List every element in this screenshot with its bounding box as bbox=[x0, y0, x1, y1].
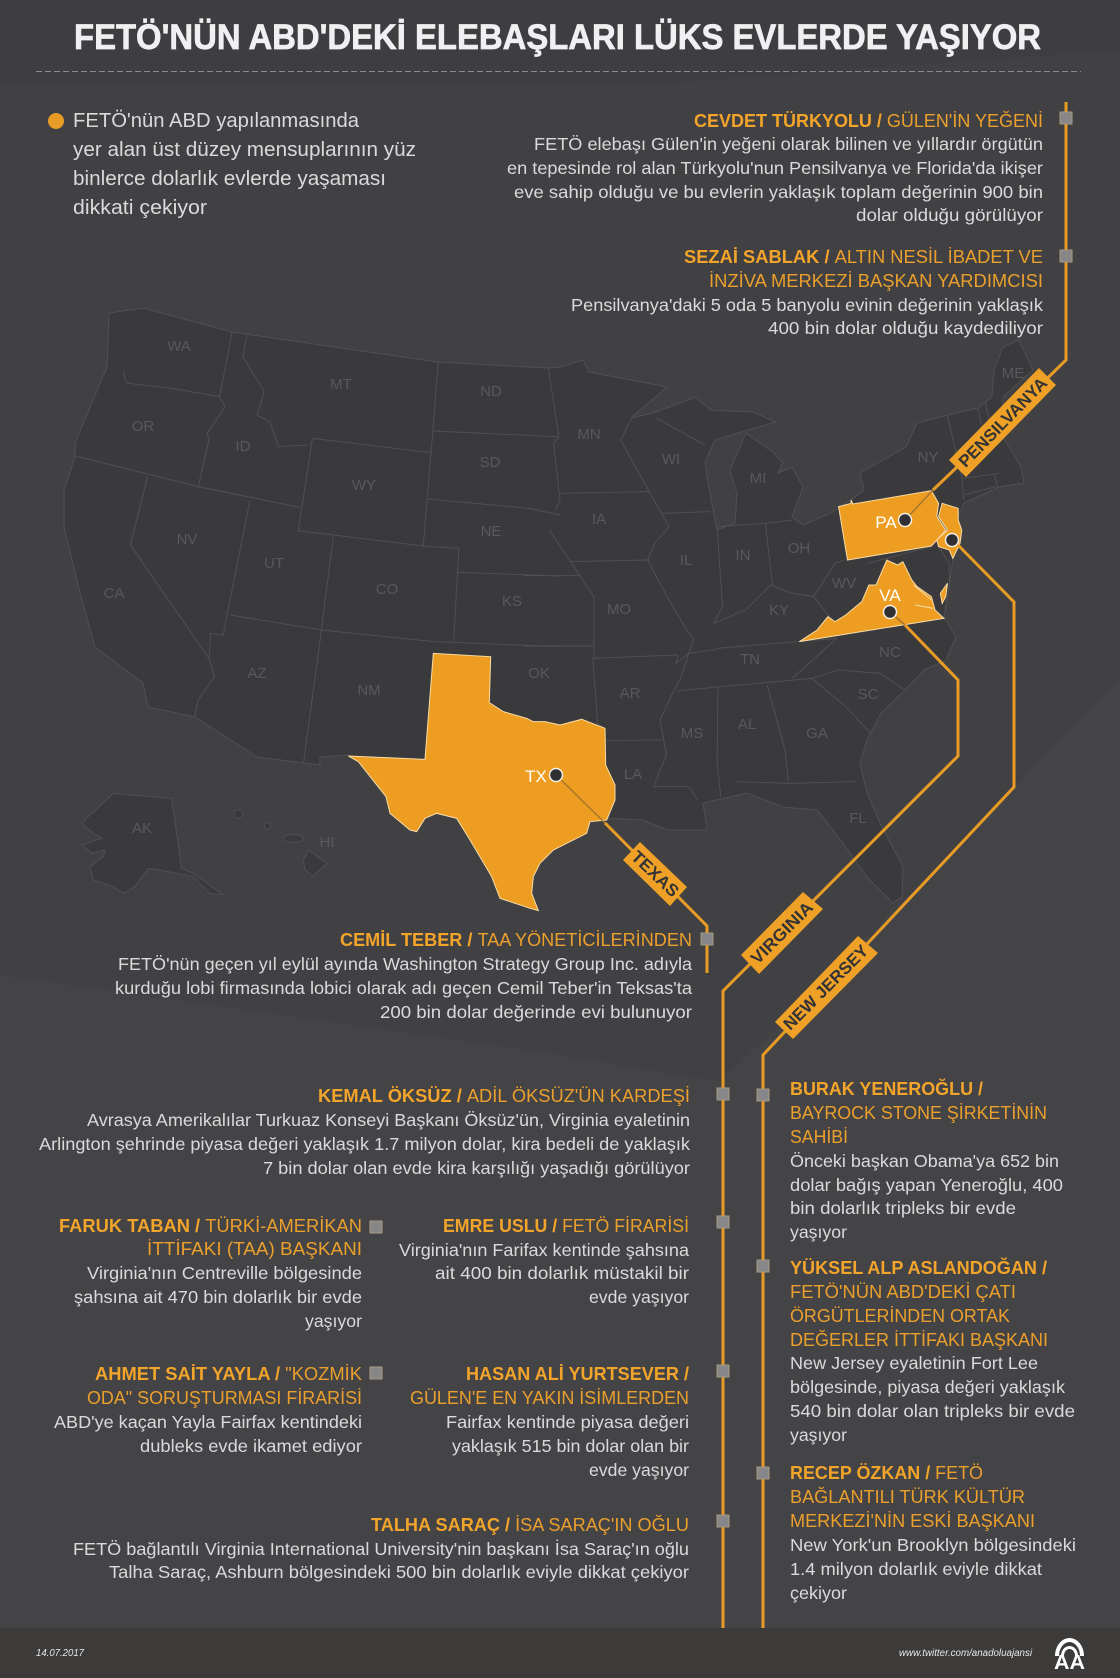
state labels: IA bbox=[592, 511, 606, 528]
body bbox=[507, 134, 1043, 225]
profile markers bbox=[370, 112, 1072, 1527]
body: Virginia'nın Centreville bölgesinde bbox=[87, 1263, 362, 1283]
icon: Anadolu Agency logo bbox=[1054, 1638, 1085, 1674]
line: Texas bbox=[556, 775, 605, 823]
state labels: OR bbox=[132, 418, 154, 435]
profile: Emre Uslu bbox=[399, 1216, 689, 1307]
icon: Anadolu Agency logo: AA bbox=[1054, 1652, 1085, 1674]
heading: CEMİL TEBER / TAA YÖNETİCİLERİNDEN bbox=[340, 930, 692, 950]
body: 200 bin dolar değerinde evi bulunuyor bbox=[380, 1002, 692, 1022]
profile: Yüksel Alp Aslandoğan bbox=[790, 1257, 1075, 1445]
body: Önceki başkan Obama'ya 652 bin bbox=[790, 1151, 1059, 1171]
state labels: NC bbox=[879, 644, 901, 661]
state labels: ID bbox=[236, 438, 251, 455]
heading: YÜKSEL ALP ASLANDOĞAN / bbox=[790, 1257, 1047, 1278]
state: Pennsylvania, New Jersey, Delaware and Virginia bbox=[799, 491, 962, 642]
state labels: OK bbox=[528, 665, 550, 682]
profile: Talha Saraç bbox=[73, 1514, 689, 1582]
state labels: MI bbox=[750, 470, 766, 487]
state labels: KY bbox=[769, 602, 789, 619]
heading: TALHA SARAÇ / İSA SARAÇ'IN OĞLU bbox=[371, 1514, 689, 1535]
state labels: MN bbox=[577, 426, 601, 443]
state labels: MS bbox=[681, 725, 703, 742]
state labels: HI bbox=[320, 834, 334, 851]
label: Virginia: VIRGINIA bbox=[747, 898, 817, 968]
label: Texas bbox=[623, 842, 687, 906]
state labels: ME bbox=[1002, 365, 1024, 382]
body: Arlington şehrinde piyasa değeri yaklaşık 1.7 milyon dolar, kira bedeli de yaklaşık bbox=[39, 1134, 690, 1154]
intro text bbox=[48, 110, 416, 219]
state labels: LA bbox=[624, 766, 642, 783]
map marker: Texas bbox=[525, 767, 562, 786]
date: 14.07.2017 bbox=[36, 1648, 84, 1659]
profile: Recep Özkan bbox=[790, 1463, 1076, 1603]
state labels: NV bbox=[177, 531, 197, 548]
footer bbox=[0, 1628, 1120, 1678]
intro text: yer alan üst düzey mensuplarının yüz bbox=[73, 139, 416, 161]
profile: Cevdet Türkyolu bbox=[507, 110, 1043, 225]
profile: Kemal Öksüz bbox=[39, 1086, 690, 1178]
body bbox=[74, 1263, 362, 1331]
connector lines bbox=[556, 102, 1066, 1628]
body: Avrasya Amerikalılar Turkuaz Konseyi Başkanı Öksüz'ün, Virginia eyaletinin bbox=[87, 1110, 690, 1130]
land bbox=[64, 308, 1033, 903]
map marker: Virginia bbox=[879, 586, 901, 618]
state labels: SD bbox=[480, 454, 501, 471]
profile: Yüksel Alp Aslandoğan: DEĞERLER İTTİFAKI BAŞKANI bbox=[790, 1329, 1048, 1350]
state labels: MO bbox=[607, 601, 631, 618]
state labels: WY bbox=[352, 477, 376, 494]
body: dolar olduğu görülüyor bbox=[856, 205, 1043, 225]
body: Talha Saraç, Ashburn bölgesindeki 500 bin dolarlık eviyle dikkat çekiyor bbox=[109, 1562, 689, 1582]
label: Pensilvanya: PENSILVANYA bbox=[955, 374, 1051, 471]
heading: EMRE USLU / FETÖ FİRARİSİ bbox=[443, 1216, 689, 1236]
body: 1.4 milyon dolarlık eviyle dikkat bbox=[790, 1559, 1042, 1579]
profile: Faruk Taban bbox=[59, 1216, 362, 1331]
body: kurduğu lobi firmasında lobici olarak adı geçen Cemil Teber'in Teksas'ta bbox=[115, 978, 692, 998]
body: yaşıyor bbox=[305, 1311, 362, 1331]
state labels: WA bbox=[167, 338, 191, 355]
map marker: New Jersey bbox=[946, 534, 958, 546]
body: yaşıyor bbox=[790, 1425, 847, 1445]
body: FETÖ bağlantılı Virginia International University'nin başkanı İsa Saraç'ın oğlu bbox=[73, 1539, 689, 1559]
body: FETÖ elebaşı Gülen'in yeğeni olarak bilinen ve yıllardır örgütün bbox=[534, 134, 1043, 154]
state labels: KS bbox=[502, 593, 522, 610]
label: Virginia bbox=[741, 892, 823, 974]
profile: Yüksel Alp Aslandoğan: ÖRGÜTLERİNDEN ORTAK bbox=[790, 1306, 1010, 1326]
body: dubleks evde ikamet ediyor bbox=[140, 1436, 362, 1456]
state labels: GA bbox=[806, 725, 828, 742]
heading: HASAN ALİ YURTSEVER / bbox=[466, 1364, 689, 1384]
source link: www.twitter.com/anadoluajansi bbox=[899, 1648, 1033, 1659]
Alaska and Hawaii bbox=[82, 793, 327, 895]
body: eve sahip olduğu ve bu evlerin yaklaşık toplam değerinin 900 bin bbox=[514, 182, 1043, 202]
body: New Jersey eyaletinin Fort Lee bbox=[790, 1353, 1038, 1373]
heading: AHMET SAİT YAYLA / "KOZMİK bbox=[95, 1364, 362, 1384]
body bbox=[571, 295, 1043, 338]
state labels: SC bbox=[858, 686, 879, 703]
state labels: AL bbox=[738, 716, 756, 733]
body: yaklaşık 515 bin dolar olan bir bbox=[452, 1436, 689, 1456]
state labels: WI bbox=[662, 451, 680, 468]
state labels: ND bbox=[480, 383, 502, 400]
icon: orange bullet bbox=[48, 113, 64, 129]
profile: Ahmet Sait Yayla: ODA" SORUŞTURMASI FİRARİSİ bbox=[87, 1388, 362, 1408]
body: evde yaşıyor bbox=[589, 1287, 689, 1307]
body bbox=[790, 1151, 1063, 1242]
state labels: AR bbox=[620, 685, 641, 702]
profile: Burak Yeneroğlu: BAYROCK STONE ŞİRKETİNİN bbox=[790, 1103, 1047, 1123]
body bbox=[39, 1110, 690, 1178]
body: 7 bin dolar olan evde kira karşılığı yaşadığı görülüyor bbox=[263, 1158, 690, 1178]
profile: Burak Yeneroğlu bbox=[790, 1078, 1063, 1242]
body bbox=[790, 1353, 1075, 1445]
body bbox=[399, 1240, 689, 1307]
state labels: IL bbox=[680, 552, 692, 569]
intro text: binlerce dolarlık evlerde yaşaması bbox=[73, 168, 386, 190]
western state borders bbox=[75, 332, 560, 763]
profile: Burak Yeneroğlu: SAHİBİ bbox=[790, 1127, 848, 1147]
intro text: FETÖ'nün ABD yapılanmasında bbox=[73, 110, 360, 132]
body: New York'un Brooklyn bölgesindeki bbox=[790, 1535, 1076, 1555]
body: çekiyor bbox=[790, 1583, 847, 1603]
body: Pensilvanya'daki 5 oda 5 banyolu evinin değerinin yaklaşık bbox=[571, 295, 1043, 315]
profile: Sezai Sablak bbox=[571, 247, 1043, 338]
body bbox=[790, 1535, 1076, 1603]
label: New Jersey: NEW JERSEY bbox=[780, 941, 873, 1034]
state labels: CA bbox=[104, 585, 124, 602]
state labels: NE bbox=[481, 523, 501, 540]
profile: Recep Özkan: MERKEZİ'NİN ESKİ BAŞKANI bbox=[790, 1511, 1035, 1531]
map marker: Virginia: VA bbox=[879, 586, 901, 605]
profile: Ahmet Sait Yayla bbox=[54, 1364, 362, 1456]
state labels bbox=[104, 338, 1024, 851]
body bbox=[54, 1412, 362, 1456]
body bbox=[446, 1412, 689, 1480]
profile: Hasan Ali Yurtsever bbox=[410, 1364, 689, 1480]
body: Fairfax kentinde piyasa değeri bbox=[446, 1412, 689, 1432]
map marker: Texas: TX bbox=[525, 767, 547, 786]
heading: FARUK TABAN / TÜRKİ-AMERİKAN bbox=[59, 1216, 362, 1236]
state labels: NY bbox=[918, 449, 938, 466]
profile: Hasan Ali Yurtsever: GÜLEN'E EN YAKIN İSİMLERDEN bbox=[410, 1388, 689, 1408]
state: Texas bbox=[348, 653, 615, 911]
profile: Faruk Taban: İTTİFAKI (TAA) BAŞKANI bbox=[147, 1239, 362, 1259]
body: 400 bin dolar olduğu kaydediliyor bbox=[768, 318, 1043, 338]
label: Texas: TEXAS bbox=[627, 847, 683, 901]
profile: Sezai Sablak: İNZİVA MERKEZİ BAŞKAN YARDIMCISI bbox=[709, 271, 1043, 291]
body: Virginia'nın Farifax kentinde şahsına bbox=[399, 1240, 689, 1260]
state labels: TN bbox=[740, 651, 760, 668]
profile: Cemil Teber bbox=[115, 930, 692, 1022]
body: en tepesinde rol alan Türkyolu'nun Pensilvanya ve Florida'da ikişer bbox=[507, 158, 1043, 178]
highlighted states bbox=[348, 491, 962, 911]
body: şahsına ait 470 bin dolarlık bir evde bbox=[74, 1287, 362, 1307]
state labels: OH bbox=[788, 540, 810, 557]
title: FETÖ'NÜN ABD'DEKİ ELEBAŞLARI LÜKS EVLERDE YAŞIYOR bbox=[74, 18, 1041, 57]
state labels: WV bbox=[832, 575, 856, 592]
profile: Yüksel Alp Aslandoğan: FETÖ'NÜN ABD'DEKİ ÇATI bbox=[790, 1282, 1016, 1302]
eastern state borders bbox=[524, 402, 999, 800]
body: ait 400 bin dolarlık müstakil bir bbox=[435, 1263, 689, 1283]
heading: KEMAL ÖKSÜZ / ADİL ÖKSÜZ'ÜN KARDEŞİ bbox=[318, 1086, 690, 1106]
state labels: MT bbox=[330, 376, 352, 393]
map marker: Pennsylvania bbox=[875, 513, 912, 532]
intro text: dikkati çekiyor bbox=[73, 197, 207, 219]
state labels: IN bbox=[736, 547, 750, 564]
body: ABD'ye kaçan Yayla Fairfax kentindeki bbox=[54, 1412, 362, 1432]
state labels: NM bbox=[357, 682, 381, 699]
heading: SEZAİ SABLAK / ALTIN NESİL İBADET VE bbox=[684, 247, 1043, 267]
map of the United States bbox=[64, 308, 1033, 903]
body: evde yaşıyor bbox=[589, 1460, 689, 1480]
line: Virginia bbox=[723, 625, 958, 1628]
body: bölgesinde, piyasa değeri yaklaşık bbox=[790, 1377, 1065, 1397]
body: FETÖ'nün geçen yıl eylül ayında Washington Strategy Group Inc. adıyla bbox=[118, 954, 692, 974]
body bbox=[115, 954, 692, 1022]
map marker: Pennsylvania: PA bbox=[875, 513, 897, 532]
line: New Jersey bbox=[763, 545, 1014, 1628]
body: dolar bağış yapan Yeneroğlu, 400 bbox=[790, 1175, 1063, 1195]
body: 540 bin dolar olan tripleks bir evde bbox=[790, 1401, 1075, 1421]
body bbox=[73, 1539, 689, 1582]
state labels: AZ bbox=[247, 665, 267, 682]
state labels: AK bbox=[132, 820, 152, 837]
state labels: UT bbox=[264, 555, 284, 572]
line: Pennsylvania bbox=[933, 102, 1066, 490]
heading: CEVDET TÜRKYOLU / GÜLEN'İN YEĞENİ bbox=[694, 110, 1043, 131]
heading: RECEP ÖZKAN / FETÖ bbox=[790, 1463, 983, 1483]
body: yaşıyor bbox=[790, 1222, 847, 1242]
profile: Recep Özkan: BAĞLANTILI TÜRK KÜLTÜR bbox=[790, 1486, 1025, 1507]
state labels: CO bbox=[376, 581, 398, 598]
heading: BURAK YENEROĞLU / bbox=[790, 1078, 983, 1099]
body: bin dolarlık tripleks bir evde bbox=[790, 1198, 1016, 1218]
state labels: FL bbox=[849, 810, 867, 827]
